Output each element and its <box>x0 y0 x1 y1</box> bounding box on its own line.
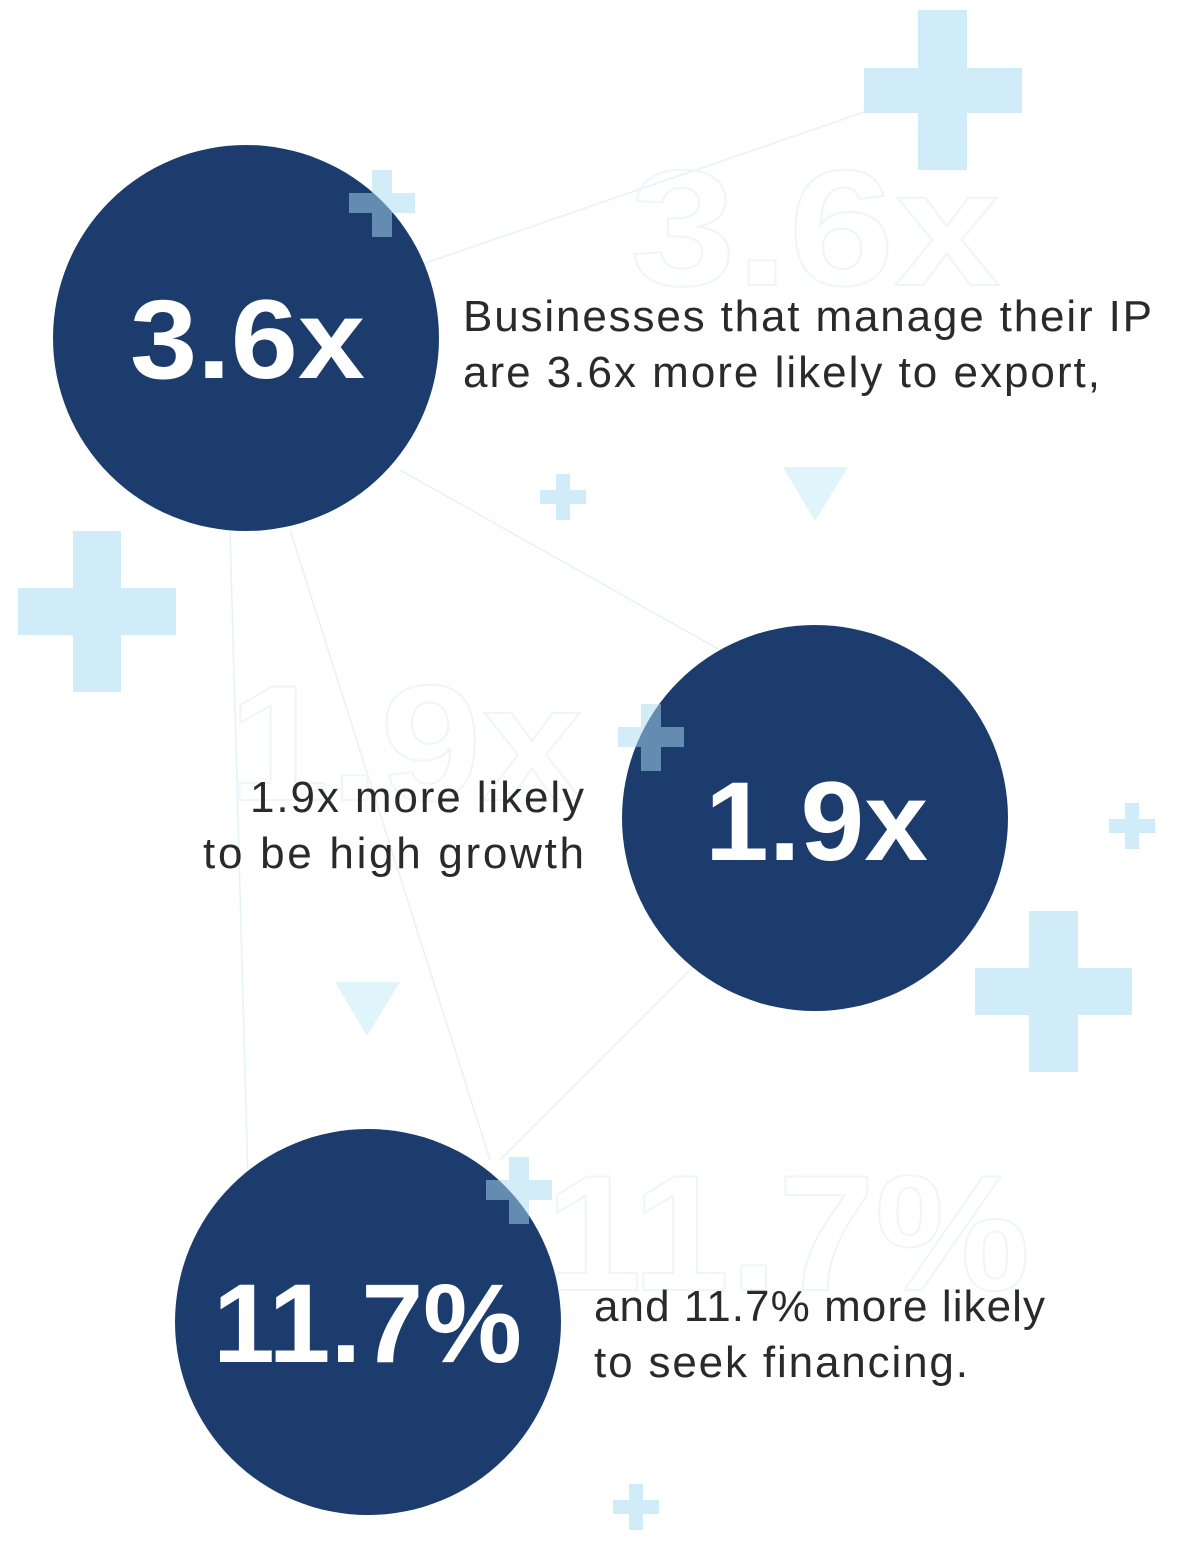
text: are 3.6x more likely to export, <box>463 348 1100 397</box>
background connecting lines <box>230 110 870 1180</box>
ghost text: 3.6x: 3.6x <box>630 136 1000 320</box>
text block: high growth <box>203 773 584 878</box>
icon: small plus bottom <box>613 1484 659 1530</box>
text block: financing: to seek financing. <box>594 1338 968 1387</box>
icon: down triangle 1 <box>783 467 848 521</box>
icon: small plus <box>540 474 586 520</box>
stat circle: 11.7%: 11.7% <box>213 1261 522 1386</box>
stat circle: 1.9x <box>622 625 1008 1011</box>
icon: large plus left <box>18 531 176 692</box>
text block: financing: and 11.7% more likely <box>594 1282 1045 1331</box>
icon: large plus right <box>975 911 1132 1072</box>
stat circle: 3.6x: 3.6x <box>130 277 365 402</box>
ghost text: 1.9x: 1.9x <box>228 651 583 835</box>
icon: small plus right <box>1109 803 1155 849</box>
text block: export: Businesses that manage their IP <box>463 292 1152 341</box>
text block: high growth: 1.9x more likely <box>250 773 584 822</box>
stat circle: 3.6x <box>53 145 439 531</box>
icon: large plus top right <box>864 10 1022 170</box>
ghost text: 11.7%: 11.7% <box>545 1141 1030 1325</box>
icon: down triangle 2 <box>335 982 400 1036</box>
text block: financing <box>594 1282 1045 1387</box>
overlapping translucent pluses <box>349 170 684 1224</box>
stat circle: 11.7% <box>175 1129 561 1515</box>
text block: high growth: to be high growth <box>203 829 584 878</box>
stat circle: 1.9x: 1.9x <box>705 759 928 884</box>
